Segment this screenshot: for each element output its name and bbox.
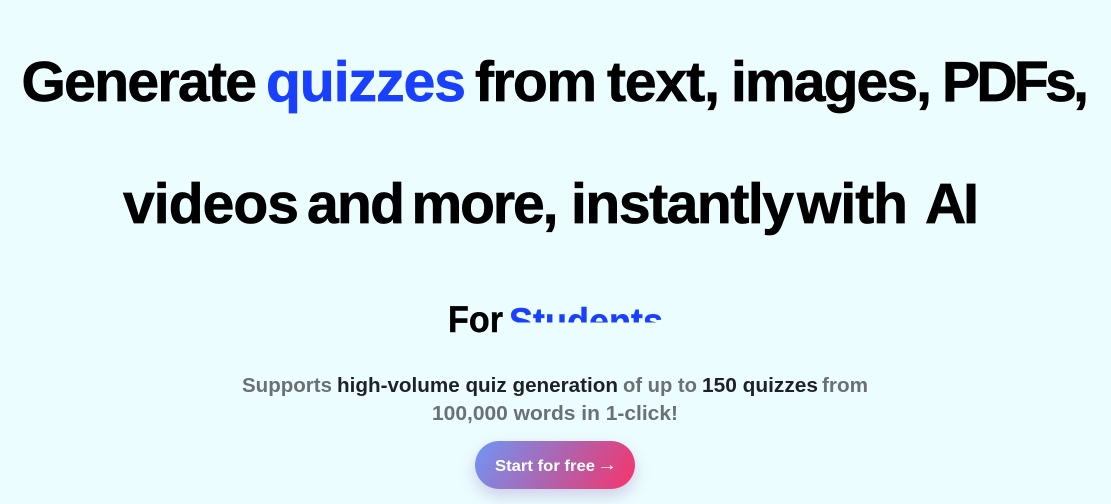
heading line 1: from bbox=[475, 50, 597, 114]
subheading: For Students (clipped): Students bbox=[509, 301, 663, 342]
heading line 1: quizzes bbox=[266, 50, 466, 114]
description text line 1 bbox=[242, 375, 868, 397]
heading line 2: instantly bbox=[571, 172, 794, 236]
heading line 2: and bbox=[307, 172, 405, 236]
heading line 1: text, bbox=[607, 50, 720, 114]
heading line 1: PDFs, bbox=[942, 50, 1089, 114]
button label: Start for free bbox=[495, 458, 595, 475]
description text line 1: Supports bbox=[242, 375, 332, 397]
heading line 2: more, bbox=[412, 172, 558, 236]
subheading: For Students (clipped) bbox=[450, 306, 662, 332]
description text line 1: high-volume quiz generation bbox=[337, 375, 618, 397]
heading line 1: images, bbox=[731, 50, 932, 114]
heading line 2: with bbox=[796, 172, 908, 236]
heading line 2: AI bbox=[925, 172, 979, 236]
button background: start for free bbox=[475, 441, 635, 489]
description text line 1: 150 quizzes bbox=[702, 375, 818, 397]
description text line 1: of up to bbox=[623, 375, 697, 397]
button label: → bbox=[597, 457, 617, 474]
heading line 1 bbox=[22, 50, 1089, 114]
heading line 2: videos bbox=[123, 172, 299, 236]
heading line 2 bbox=[123, 172, 979, 236]
heading line 1: Generate bbox=[22, 50, 257, 114]
description text line 1: from bbox=[822, 375, 868, 397]
subheading: For Students (clipped): For bbox=[448, 299, 503, 340]
description text line 2: 100,000 words in 1-click! bbox=[432, 403, 678, 425]
